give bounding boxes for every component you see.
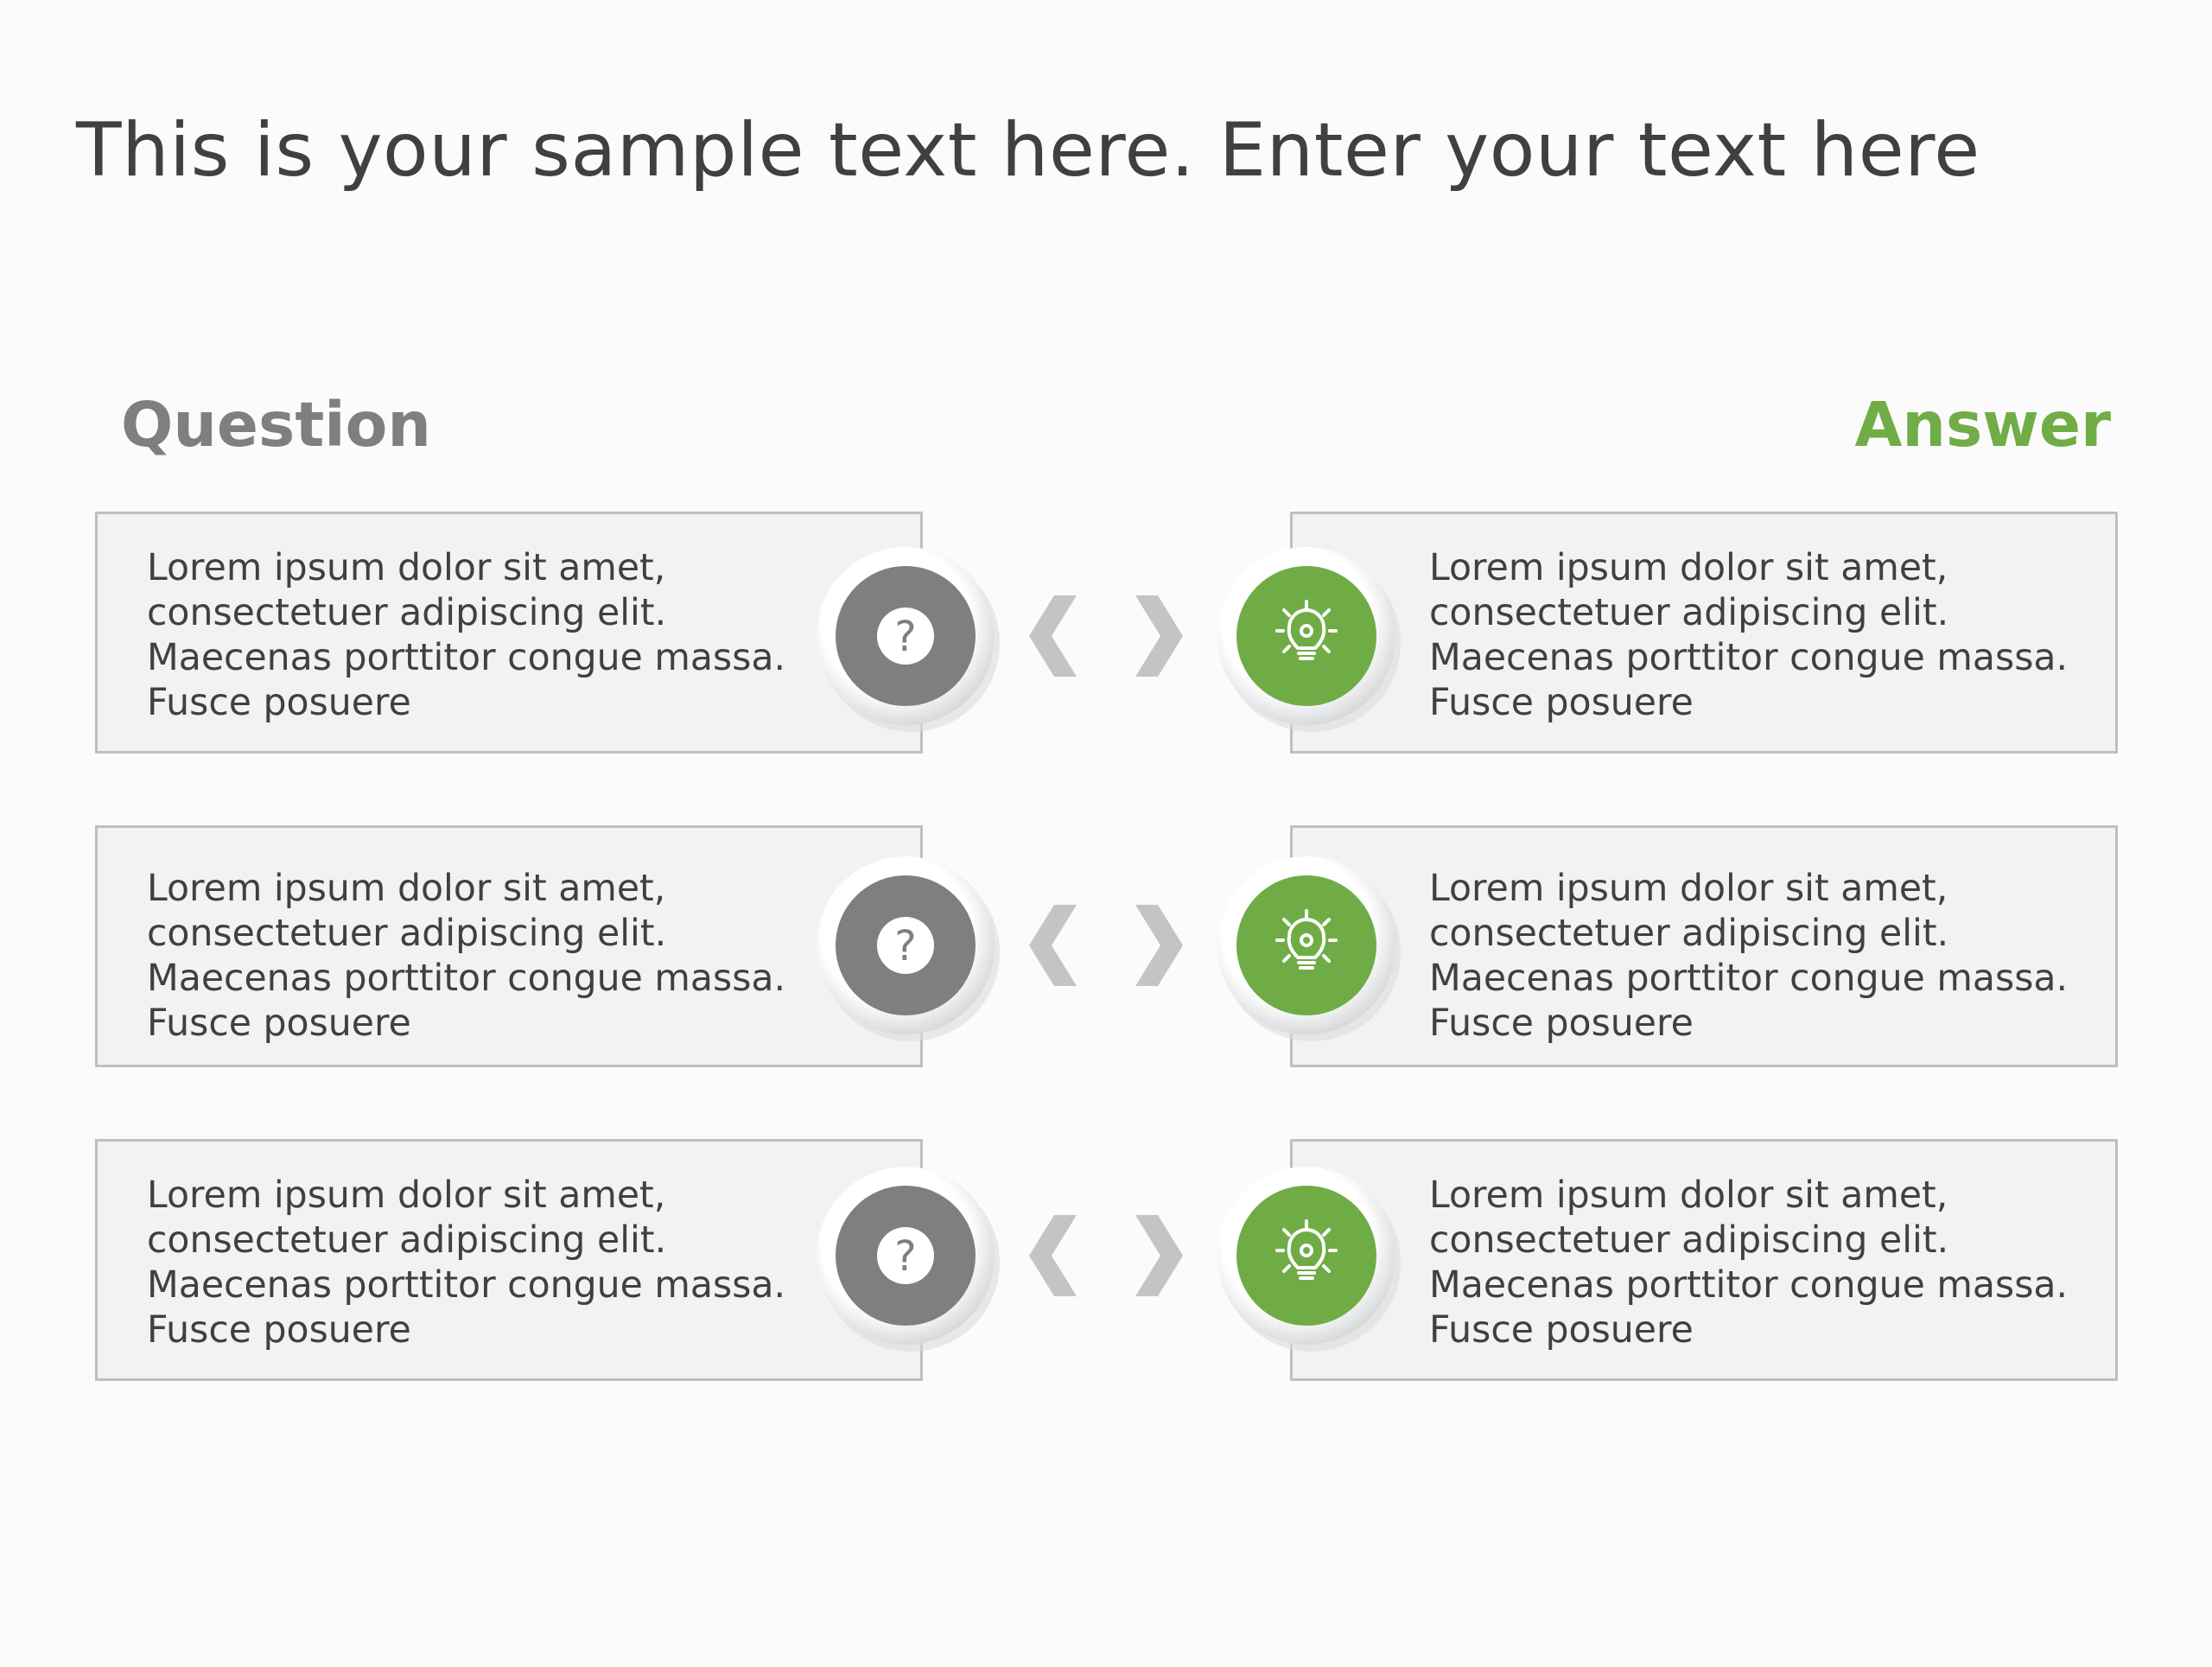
panel: answer 3: consectetuer adipiscing elit. — [1429, 1218, 1948, 1262]
panel: answer 2: Maecenas porttitor congue massa. — [1429, 957, 2068, 1000]
panel: question 2 — [95, 825, 923, 1067]
row 3 icons and arrows — [817, 1167, 1401, 1352]
panel: question 3: Fusce posuere — [147, 1308, 411, 1352]
panel: answer 3 — [1290, 1139, 2118, 1381]
panel: answer 1: Lorem ipsum dolor sit amet, — [1429, 546, 1948, 589]
row 1 icons and arrows — [817, 547, 1401, 732]
panel: question 1: Maecenas porttitor congue massa. — [147, 636, 785, 679]
panel: question 2: Maecenas porttitor congue massa. — [147, 957, 785, 1000]
title: This is your sample text here. Enter your text here — [76, 107, 1980, 194]
panel: question 2: Fusce posuere — [147, 1002, 411, 1045]
panel: question 2: Lorem ipsum dolor sit amet, — [147, 867, 665, 910]
panel: question 1: Lorem ipsum dolor sit amet, — [147, 546, 665, 589]
panel: answer 2: Fusce posuere — [1429, 1002, 1694, 1045]
panel: answer 2: Lorem ipsum dolor sit amet, — [1429, 867, 1948, 910]
panel: answer 1: Maecenas porttitor congue massa. — [1429, 636, 2068, 679]
panel: question 2: consectetuer adipiscing elit. — [147, 912, 666, 955]
heading: question: Question — [121, 389, 431, 461]
panel: answer 2: consectetuer adipiscing elit. — [1429, 912, 1948, 955]
panel: answer 3: Maecenas porttitor congue massa. — [1429, 1263, 2068, 1307]
panel: answer 3: Fusce posuere — [1429, 1308, 1694, 1352]
panel: question 3: consectetuer adipiscing elit. — [147, 1218, 666, 1262]
row 2 icons and arrows — [817, 856, 1401, 1041]
panel: answer 2 — [1290, 825, 2118, 1067]
heading: answer: Answer — [1854, 389, 2111, 461]
panel: question 1: consectetuer adipiscing elit. — [147, 591, 666, 634]
panel: answer 1: Fusce posuere — [1429, 681, 1694, 724]
panel: question 3: Lorem ipsum dolor sit amet, — [147, 1174, 665, 1217]
panel: answer 3: Lorem ipsum dolor sit amet, — [1429, 1174, 1948, 1217]
panel: answer 1 — [1290, 512, 2118, 754]
panel: question 1 — [95, 512, 923, 754]
panel: answer 1: consectetuer adipiscing elit. — [1429, 591, 1948, 634]
panel: question 1: Fusce posuere — [147, 681, 411, 724]
panel: question 3: Maecenas porttitor congue massa. — [147, 1263, 785, 1307]
panel: question 3 — [95, 1139, 923, 1381]
